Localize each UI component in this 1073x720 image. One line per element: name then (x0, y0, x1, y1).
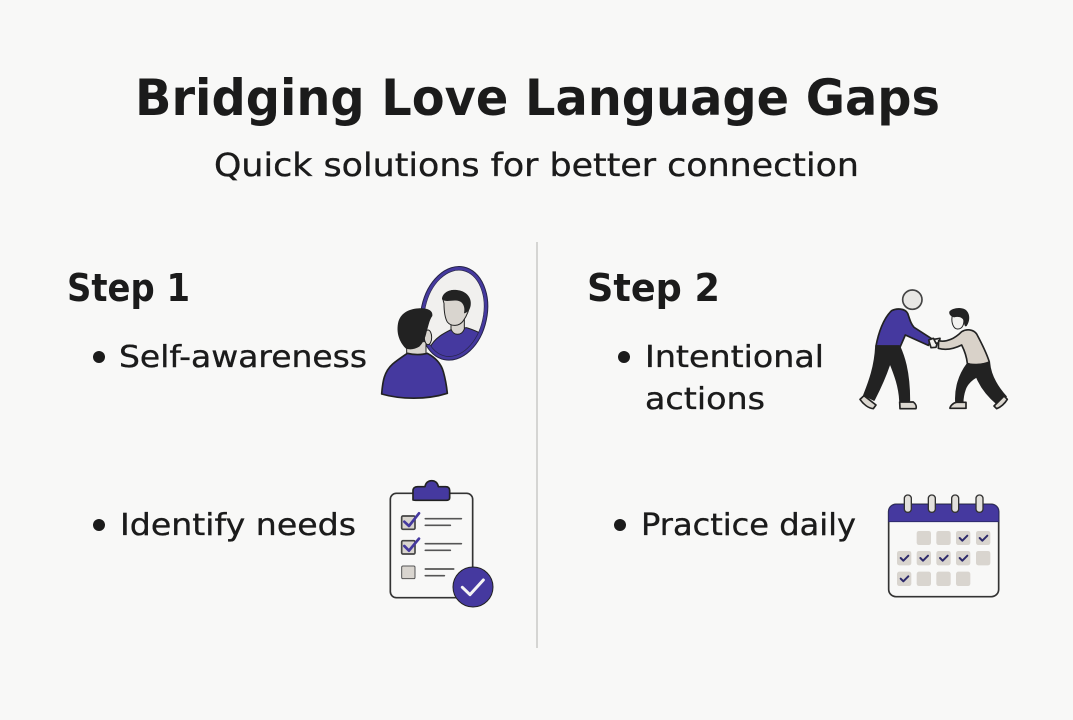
icon: habit calendar (889, 495, 999, 597)
subtitle: Quick solutions for better connection (214, 146, 859, 184)
panel: step 2 (587, 266, 1007, 597)
icon: person looking in mirror (382, 260, 496, 398)
bullet: self-awareness: Self-awareness (119, 340, 367, 375)
bullet: practice daily: Practice daily (641, 508, 856, 543)
icon: two people shaking hands (860, 290, 1007, 409)
panel: step 1 (67, 260, 496, 607)
step 1 heading: Step 1 (67, 266, 190, 310)
title: Bridging Love Language Gaps (135, 69, 940, 127)
step 2 heading: Step 2 (587, 266, 720, 310)
bullet: intentional actions: actions (645, 382, 765, 417)
bullet: intentional actions (618, 340, 824, 417)
icon: checklist clipboard (390, 481, 493, 607)
bullet: identify needs: Identify needs (120, 508, 356, 543)
bullet: intentional actions: Intentional (645, 340, 824, 375)
